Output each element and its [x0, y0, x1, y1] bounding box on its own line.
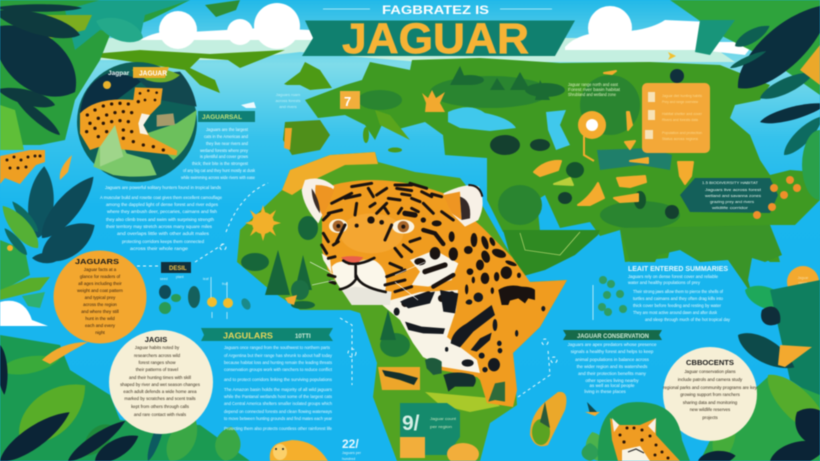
foliage top right	[670, 0, 820, 160]
map: Africa forest	[241, 216, 410, 357]
panel: orange circle JAGUARS: and where they still	[81, 309, 119, 314]
map: north America strip	[80, 50, 285, 93]
text block: lower centre: depend on connected forests and clean flowing waterways	[224, 409, 333, 414]
map: lower Asia lake band	[597, 148, 672, 170]
map: orange shrub	[422, 90, 445, 112]
panel: cream circle JAGIS: Jaguar habits noted by	[135, 345, 180, 350]
panel: dark text block on map	[680, 178, 778, 213]
map label text: Forest river basin habitat	[568, 87, 621, 92]
text block: lower centre: and Central America shelters smaller isolated groups which	[224, 401, 332, 406]
icons: diet diagram: fruit	[222, 282, 228, 286]
panel: orange facts: Status across regions	[662, 137, 698, 141]
circle heading: Jagpar	[108, 70, 130, 77]
stat: 22/: hundred	[342, 457, 355, 461]
band: section heading right: JAGUAR CONSERVATION	[577, 334, 649, 340]
text block: lower right: other species living nearby	[585, 378, 639, 383]
foliage mid left	[0, 165, 102, 308]
panel: orange circle JAGUARS: JAGUARS	[75, 257, 119, 266]
small orange circle right	[787, 266, 819, 298]
left ear	[302, 178, 334, 223]
panel: orange facts: Prey and range overview	[662, 100, 698, 104]
map label text	[568, 82, 621, 97]
icons: sapling cluster	[593, 276, 627, 320]
foliage near bottom jaguar	[582, 402, 610, 461]
panel: cream circle CBBOCENTS: Jaguar conservation plans	[684, 369, 736, 374]
text block: lower centre: of Argentina but their range has shrunk to about half today	[224, 353, 333, 358]
panel: orange facts: Population and protection	[662, 131, 702, 135]
panel: dark text block on map: grazing prey and rivers	[710, 199, 754, 204]
text block: lower centre: because habitat loss and hunting remain the leading threats	[224, 360, 333, 365]
panel: cream circle CBBOCENTS: sharing data and monitoring	[683, 400, 738, 405]
small yellow bird	[668, 52, 676, 60]
map: Eurasia landmass	[305, 58, 820, 262]
map label text: Jaguar range north and east	[568, 82, 619, 87]
panel: cream circle JAGIS: kept from others through calls	[131, 404, 190, 409]
text block: lower centre: The Amazon basin holds the majority of all wild jaguars	[224, 387, 333, 392]
panel: orange facts: Rivers and forests data	[662, 118, 699, 122]
orange flower dots	[753, 176, 813, 219]
map text: upper left: Jaguars roam	[276, 92, 301, 97]
text block: heading right	[628, 266, 731, 322]
band: JAGULARS	[201, 328, 333, 341]
title banner: JAGUAR	[342, 15, 529, 63]
jaguar body and head	[302, 178, 567, 407]
panel: cream circle JAGIS: their patterns of travel	[136, 367, 178, 372]
text block: upper: is plentiful and cover grows	[200, 154, 249, 159]
stat: 22/: 22/	[342, 437, 359, 451]
panel: cream circle CBBOCENTS	[663, 347, 758, 441]
text block: upper: thick; their bite is the strongest	[192, 161, 249, 166]
panel: orange circle JAGUARS: across the region	[83, 302, 117, 307]
map: Arabia inset line	[520, 232, 580, 255]
panel: cream circle CBBOCENTS: regional parks and community programs are key	[663, 385, 758, 390]
map text: upper left: and rivers	[279, 104, 297, 109]
panel: cream circle CBBOCENTS: new wildlife reserves	[690, 407, 731, 412]
stat: 22/	[342, 437, 362, 461]
map: Caspian Sea	[546, 110, 570, 150]
panel: orange circle JAGUARS: Jaguar facts at a	[84, 267, 117, 272]
small orange circle right: Jaguar	[798, 276, 809, 280]
chest white	[380, 290, 480, 373]
map: Great Britain	[284, 62, 332, 90]
text block: heading right: thick cover before feeding and resting by water	[633, 303, 721, 308]
dashed route lines	[137, 183, 557, 397]
panel: cream circle JAGIS: marked by scratches and scent trails	[124, 396, 196, 401]
small jaguar left	[0, 150, 45, 184]
map: india and southeast landmass	[620, 225, 782, 295]
map: orange animals	[534, 71, 693, 205]
chest markings in crop coordinates	[394, 290, 545, 402]
panel: orange facts: Jaguar diet hunting habits	[662, 94, 702, 98]
text block: lower centre: and to protect corridors linking the surviving populations	[224, 377, 333, 382]
stat tile orange bottom	[400, 437, 425, 458]
orange leaf fish lower	[42, 342, 88, 364]
bottom animal: capybara	[270, 440, 328, 461]
panel: orange circle JAGUARS: each and every	[85, 323, 116, 328]
panel: cream circle CBBOCENTS: projects	[702, 415, 718, 420]
jaguar body	[80, 87, 177, 155]
clouds right	[565, 6, 755, 55]
dark badge	[670, 69, 684, 83]
cloud puff	[241, 102, 256, 108]
text block: heading right: They are most active around dawn and after dusk	[633, 310, 718, 315]
label: dark tag	[161, 262, 191, 273]
title kicker: FAGBRATEZ IS	[382, 5, 489, 17]
panel: orange circle JAGUARS: weight and coat pattern	[77, 288, 123, 293]
panel: cream circle JAGIS: JAGIS	[145, 335, 167, 344]
map: Africa south lime zone	[425, 392, 500, 412]
map: forest trees	[450, 66, 679, 219]
text block: middle left: A muscular build and rosette coat gives them excellent camouflage	[100, 195, 222, 200]
text block: heading right: water and healthy populations of prey	[628, 280, 701, 285]
band: JAGULARS: JAGULARS	[223, 332, 274, 340]
text block: lower centre: conservation groups work with ranchers to reduce conflict	[224, 367, 333, 372]
panel: cream circle CBBOCENTS: growing support from ranchers	[680, 392, 741, 397]
panel: cream circle JAGIS: researchers across wild	[134, 353, 181, 358]
map: Africa landmass	[237, 152, 567, 461]
panel: orange circle JAGUARS: hunt in the wild	[85, 316, 115, 321]
band: small heading: JAGUARSAL	[202, 115, 242, 121]
upper left circle: jaguar in habitat	[77, 62, 197, 182]
text block: lower centre: to move between hunting grounds and find mates each year	[224, 416, 332, 421]
stat tile teal: per region	[430, 424, 452, 429]
panel: orange circle JAGUARS: all ages including their	[78, 281, 122, 286]
map: Arabia	[503, 230, 600, 277]
text block: lower centre: Protecting them also protects countless other rainforest life	[224, 426, 332, 431]
icons: diet diagram	[159, 275, 252, 319]
foliage right edge	[802, 130, 820, 200]
stat tile teal: Jaguar count	[430, 416, 457, 421]
map: top island	[205, 0, 240, 17]
map: Black Sea	[448, 107, 516, 131]
panel: dark text block on map: wildlife corridor	[712, 205, 749, 210]
text block: heading right: and sleep through much of the hot tropical day	[645, 317, 731, 322]
text block: lower right: and their protection benefits many	[578, 371, 647, 376]
body spots	[355, 216, 535, 305]
text block: lower centre: while the Pantanal wetlands host some of the largest cats	[224, 394, 333, 399]
map: Africa south orange band with crocodile	[378, 367, 420, 390]
clouds left	[140, 3, 314, 49]
foliage top left	[0, 0, 190, 150]
map label text: Shrubland and wetland zone	[568, 92, 617, 97]
text block: heading right: Jaguars rely on dense forest cover and reliable	[628, 274, 718, 279]
circle heading	[108, 67, 169, 78]
icons: diet diagram: plant	[176, 275, 184, 279]
panel: orange facts	[642, 83, 710, 153]
text block: lower right: the wider region and its watersheds	[577, 364, 648, 369]
text block: upper: while swimming across wide rivers with ease	[181, 175, 255, 180]
map: stat tile orange 7: 7	[344, 94, 351, 109]
map: Iberia	[283, 120, 330, 155]
panel: cream circle JAGIS: shaped by river and wet season changes	[120, 382, 201, 387]
map: Eurasia darker shading	[358, 75, 680, 229]
icons: diet diagram: leaf	[203, 277, 209, 281]
text block: heading right: Their strong jaws allow them to pierce the shells of	[633, 289, 724, 294]
map text: upper left	[276, 92, 301, 109]
text block: lower centre	[224, 345, 333, 431]
right ear	[443, 185, 483, 227]
head details in crop coordinates	[302, 178, 535, 305]
map: small orange animal	[285, 295, 297, 305]
icons: diet diagram: seed	[160, 277, 168, 281]
panel: dark text block on map: Jaguars live across forest	[705, 187, 762, 192]
band: JAGULARS: 10TTI	[295, 334, 311, 340]
text block: middle left	[100, 185, 222, 251]
foliage bottom left	[0, 335, 250, 461]
text block: middle left: across their whole range	[130, 246, 189, 251]
map: Africa north desert edge	[282, 152, 378, 195]
orange leaf fish	[60, 155, 72, 180]
panel: cream circle JAGIS: and their hunting times with skill	[129, 375, 191, 380]
horizon band	[80, 38, 735, 62]
panel: cream circle CBBOCENTS: CBBOCENTS	[686, 358, 734, 367]
panel: orange circle JAGUARS	[54, 250, 146, 344]
stat tile teal	[400, 403, 460, 455]
text block: lower right	[567, 342, 657, 394]
panel: orange circle JAGUARS: night	[95, 330, 106, 335]
panel: cream circle JAGIS: each adult defends a wide home area	[123, 389, 197, 394]
map: sun icon	[245, 205, 281, 241]
text block: upper: Jaguars are the largest	[206, 127, 249, 132]
panel: orange facts: Habitat shelter and cover	[662, 112, 703, 116]
text block: heading right: LEAIT ENTERED SUMMARIES	[628, 266, 728, 273]
text block: upper: they live near rivers and	[206, 141, 248, 146]
nose and mouth	[341, 256, 363, 265]
circle heading: JAGUAR	[139, 70, 167, 78]
text block: middle left: Jaguars are powerful solitary hunters found in tropical lands	[105, 185, 222, 190]
text block: heading right: turtles and caimans and they often drag kills into	[633, 296, 723, 301]
text block: middle left: protecting corridors keeps them connected	[122, 239, 204, 244]
map: stat tile orange 7	[340, 91, 360, 109]
orange body	[322, 180, 567, 407]
panel: orange circle JAGUARS: glance for readers of	[80, 274, 121, 279]
small orange ellipse bottom	[447, 443, 479, 461]
text block: middle left: their territory may stretch across many square miles	[106, 224, 213, 229]
title banner	[302, 15, 575, 63]
white cloud left	[0, 301, 48, 326]
text block: middle left: they also climb trees and swim with surprising strength	[106, 217, 214, 222]
band: section heading right	[563, 330, 662, 340]
text block: upper: of any big cat and they hunt mostly at dusk	[183, 168, 256, 173]
foliage lower right	[697, 280, 820, 461]
text block: lower right: animal populations in balance across	[575, 357, 650, 362]
panel: cream circle JAGIS	[109, 330, 213, 434]
forehead lighter	[340, 213, 403, 253]
bottom jaguar with green circle	[598, 402, 690, 461]
map: Italy and islands	[375, 110, 410, 140]
text block: upper: cats in the Americas and	[204, 134, 248, 139]
muzzle	[332, 260, 386, 292]
eyes	[329, 219, 348, 233]
panel: cream circle JAGIS: and rare contact with rivals	[134, 412, 187, 417]
panel: dark text block on map: 1.5 BIODIVERSITY HABITAT	[702, 180, 759, 185]
text block: upper: wetland forests where prey	[200, 148, 249, 153]
panel: dark text block on map: wetland and savanna zones	[705, 193, 761, 198]
map: Mediterranean islands	[363, 127, 402, 152]
stat: 22/: Jaguars per	[342, 451, 362, 455]
whiskers	[310, 262, 425, 300]
text block: lower right: Jaguars are apex predators whose presence	[567, 342, 657, 347]
text block: upper	[181, 127, 256, 180]
text block: lower right: living in these places	[584, 389, 627, 394]
map text: upper left: across forests	[276, 98, 300, 103]
text block: middle left: where they ambush deer, peccaries, caimans and fish	[107, 209, 217, 214]
white cheek patch	[410, 250, 458, 287]
text block: lower right: as well as local people	[589, 383, 635, 388]
band: small heading	[198, 111, 255, 122]
panel: orange circle JAGUARS: and typical prey	[85, 295, 116, 300]
facial marks	[322, 183, 453, 303]
label: dark tag: DESIL	[169, 266, 187, 272]
small orange circle right: range	[799, 281, 808, 285]
text block: lower centre: Jaguars once ranged from the southwest to northern parts	[224, 345, 331, 350]
map: yellow location pin	[578, 111, 606, 161]
text block: middle left: among the dappled light of dense forest and river edges	[106, 202, 219, 207]
panel: cream circle JAGIS: forest ranges show	[138, 360, 176, 365]
Madagascar	[530, 392, 566, 446]
text block: middle left: and overlaps little with other adult males	[117, 231, 210, 236]
stat tile teal: 9/	[402, 412, 420, 435]
panel: cream circle CBBOCENTS: include patrols and camera study	[678, 377, 743, 382]
text block: lower right: signals a healthy forest and helps to keep	[571, 349, 654, 354]
